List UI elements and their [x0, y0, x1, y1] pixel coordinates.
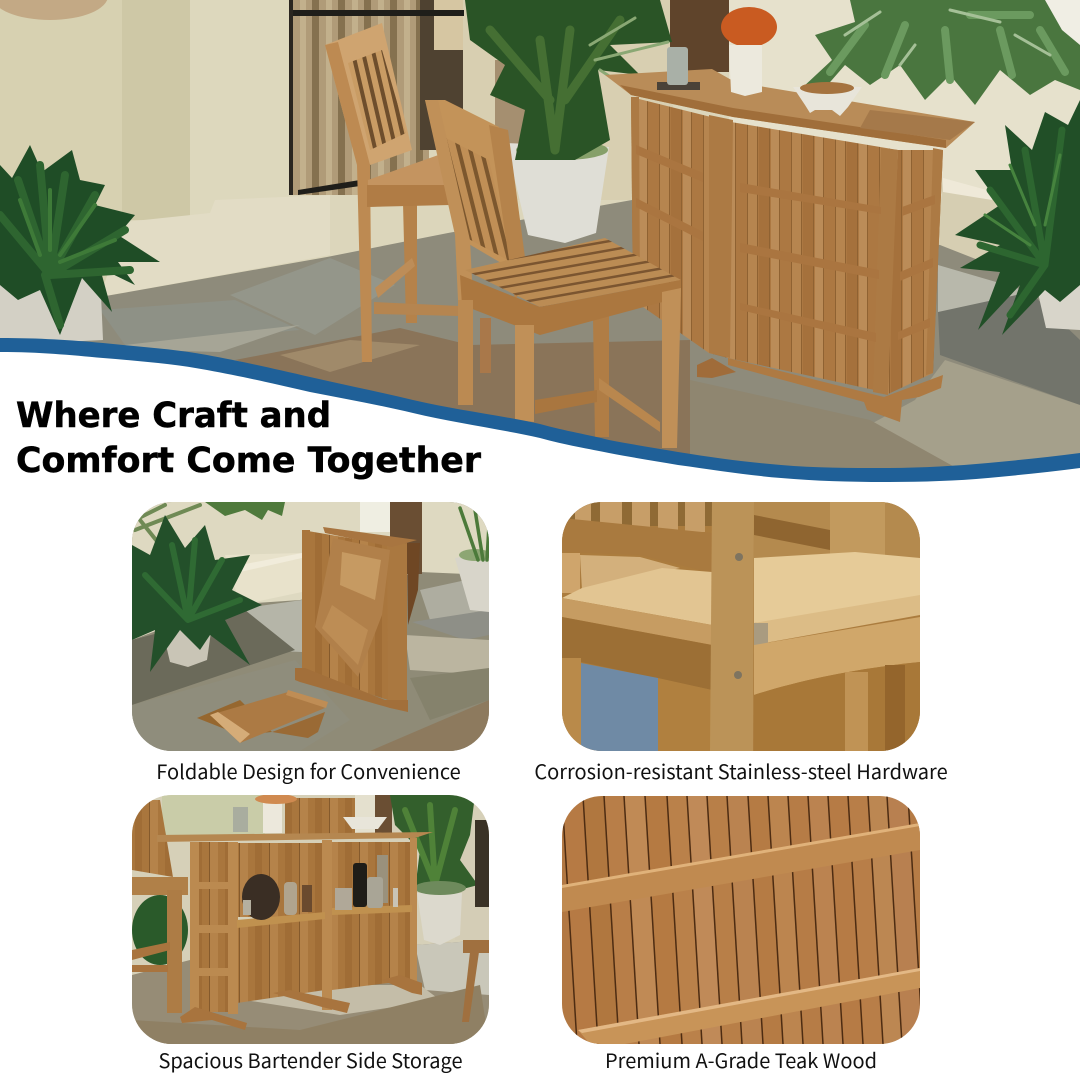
- lower cross rail: [578, 968, 920, 1044]
- open bar: [157, 832, 433, 1030]
- blue curved band: [0, 338, 1080, 482]
- vase: [729, 45, 762, 96]
- loose boards on floor: [197, 690, 328, 743]
- chair back: [425, 100, 508, 262]
- area behind seat: [580, 555, 680, 590]
- individual slats: [547, 796, 940, 1044]
- folded bar: [295, 527, 420, 712]
- caption: bartender storage: Spacious Bartender Side Storage: [158, 1045, 463, 1074]
- bar top: [605, 69, 975, 148]
- almonds in bowl: [800, 82, 854, 94]
- hanging fern top: [205, 502, 285, 520]
- wall and ledge: [132, 502, 489, 640]
- front chair: [425, 100, 681, 448]
- side table: [462, 940, 489, 1022]
- back chair and curtain: [285, 795, 392, 834]
- back panels: [237, 843, 325, 917]
- rear bar chair: [325, 23, 500, 373]
- lower panels: [237, 915, 325, 1003]
- front cross rails: [636, 145, 935, 342]
- left chair: [132, 800, 188, 1013]
- right fern in pot: [955, 100, 1080, 335]
- panel: teak wood close-up photo: [547, 796, 940, 1044]
- caption: foldable design: Foldable Design for Convenience: [156, 756, 461, 785]
- upper right backrest: [754, 502, 920, 562]
- fern behind left chair: [132, 895, 188, 965]
- palm fronds upper left: [135, 505, 200, 545]
- left side panel: [631, 97, 731, 358]
- right seat top: [754, 552, 920, 623]
- hanging fern upper right: [802, 0, 1080, 105]
- backrest rail: [562, 518, 712, 573]
- hero photo: teak bar and chairs on patio: [0, 0, 1080, 480]
- right side panel: [886, 150, 943, 395]
- right seat edge: [754, 595, 920, 645]
- plant and pot right: [455, 508, 491, 612]
- glass: [667, 47, 688, 85]
- right apron: [754, 617, 920, 695]
- title: Comfort Come Together: [16, 441, 482, 481]
- seat: [465, 238, 681, 307]
- lower centre boards: [658, 678, 712, 751]
- bar feet: [697, 358, 736, 378]
- front legs: [458, 300, 473, 405]
- left seat edge: [562, 598, 712, 645]
- feet: [180, 1007, 247, 1030]
- left seat top: [562, 568, 712, 625]
- caption: teak wood: Premium A-Grade Teak Wood: [605, 1045, 877, 1074]
- lower right boards: [754, 662, 920, 751]
- bar top items: [657, 7, 862, 116]
- bowl: [793, 87, 862, 116]
- centre palm in white pot: [465, 0, 672, 243]
- left apron: [562, 617, 712, 690]
- screw heads: [734, 553, 743, 679]
- steel-toned seat corner: [754, 623, 768, 645]
- lower left board: [562, 658, 581, 751]
- plant and pot right: [390, 795, 489, 945]
- wall right: [455, 830, 489, 940]
- wall background: [0, 0, 1080, 296]
- floor stones: [132, 575, 489, 751]
- coaster: [657, 82, 700, 90]
- front panel: [728, 122, 898, 393]
- title: Where Craft and: [16, 396, 331, 436]
- blue reflection patch: [581, 663, 658, 751]
- caption: stainless-steel hardware: Corrosion-resistant Stainless-steel Hardware: [534, 756, 948, 785]
- panel: bartender side storage photo: [132, 794, 489, 1044]
- vertical chair post: [710, 502, 754, 751]
- left fern in pot: [0, 145, 160, 345]
- rear curtain panel behind plant: [495, 60, 525, 144]
- shelves: [237, 912, 325, 928]
- window with curtains: [289, 0, 464, 195]
- title: [16, 396, 482, 481]
- outdoor view: [162, 795, 265, 835]
- flowers: [721, 7, 777, 47]
- floor: [132, 940, 489, 1044]
- bar cabinet: [605, 69, 975, 422]
- panel: stainless-steel hardware photo: [562, 502, 920, 751]
- items on bar top: [233, 794, 387, 833]
- backrest slats: [562, 502, 712, 532]
- left side panel: [190, 842, 237, 1012]
- patio floor: [80, 200, 1080, 468]
- wall ledge right: [939, 182, 999, 258]
- panel frame posts: [631, 97, 943, 395]
- slat seams: [562, 796, 923, 1044]
- upper cross rail: [562, 823, 920, 912]
- panel: foldable design photo: [132, 502, 491, 751]
- plant and pot: [132, 515, 262, 672]
- left post: [562, 553, 580, 593]
- bar top: [157, 832, 433, 842]
- bottles and jars on shelf: [242, 855, 398, 920]
- back legs: [593, 315, 609, 437]
